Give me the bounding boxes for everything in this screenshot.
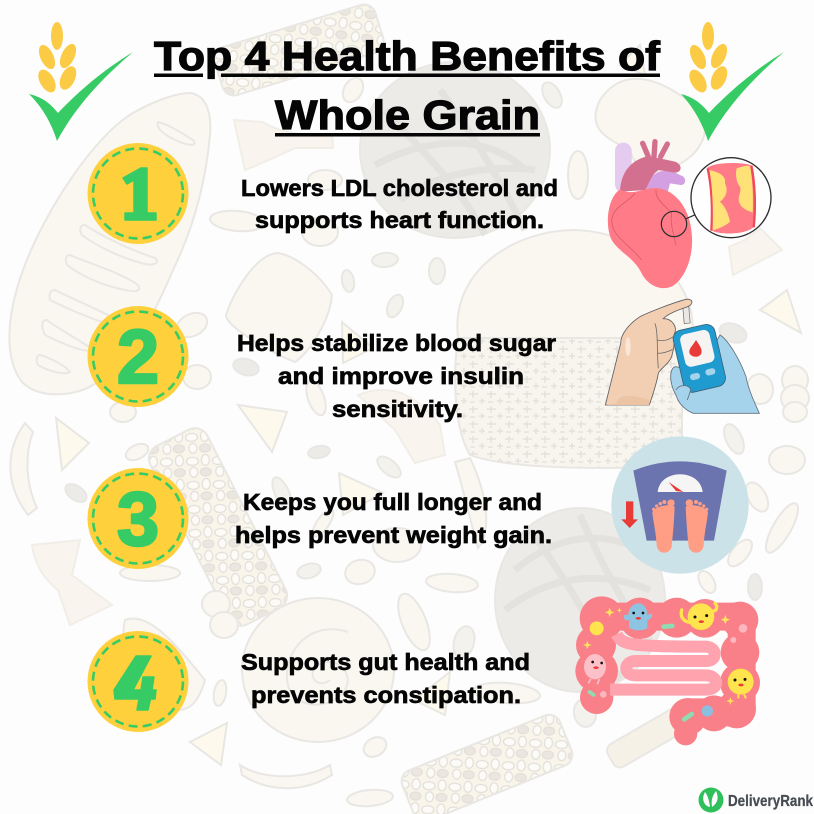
- badge: number 3: 3: [117, 477, 159, 562]
- text: benefit 1: supports heart function.: [255, 207, 544, 233]
- text: benefit 2: sensitivity.: [332, 396, 463, 422]
- badge: number 1: [88, 143, 188, 244]
- text: benefit 2: [237, 330, 556, 422]
- crackers: [595, 79, 705, 171]
- icon: wheat and check left: [29, 22, 133, 141]
- macaroni: [10, 423, 37, 515]
- icon: glucose meter in hand: [605, 299, 759, 413]
- bowties: [234, 120, 333, 170]
- text: benefit 4: [241, 649, 530, 708]
- badge: number 3: [88, 468, 188, 569]
- icon: weighing scale: [611, 436, 749, 574]
- badge: number 4: [88, 631, 188, 732]
- spiral roll: [242, 598, 394, 742]
- title: Whole Grain: [275, 92, 540, 138]
- icon: intestines with friendly bacteria: [575, 596, 760, 745]
- title: Top 4 Health Benefits of: [154, 33, 660, 79]
- icon: heart with artery: [608, 142, 771, 288]
- text: benefit 1: [241, 175, 558, 233]
- badge: number 2: [88, 306, 188, 407]
- dark breads: [360, 62, 550, 238]
- text: benefit 4: prevents constipation.: [251, 682, 521, 708]
- icon: wheat and check right: [681, 22, 784, 141]
- badge: number 2: 2: [117, 315, 159, 400]
- text: benefit 2: and improve insulin: [278, 363, 524, 389]
- text: benefit 2: Helps stabilize blood sugar: [237, 330, 556, 356]
- text: benefit 3: helps prevent weight gain.: [235, 522, 552, 548]
- text: benefit 1: Lowers LDL cholesterol and: [241, 175, 558, 201]
- grain bars: [211, 2, 387, 98]
- text: benefit 3: [235, 489, 552, 548]
- woven basket: [457, 230, 693, 338]
- text: benefit 3: Keeps you full longer and: [243, 489, 542, 515]
- logo: DeliveryRank: [698, 788, 813, 812]
- title: [154, 33, 660, 138]
- text: benefit 4: Supports gut health and: [241, 649, 530, 675]
